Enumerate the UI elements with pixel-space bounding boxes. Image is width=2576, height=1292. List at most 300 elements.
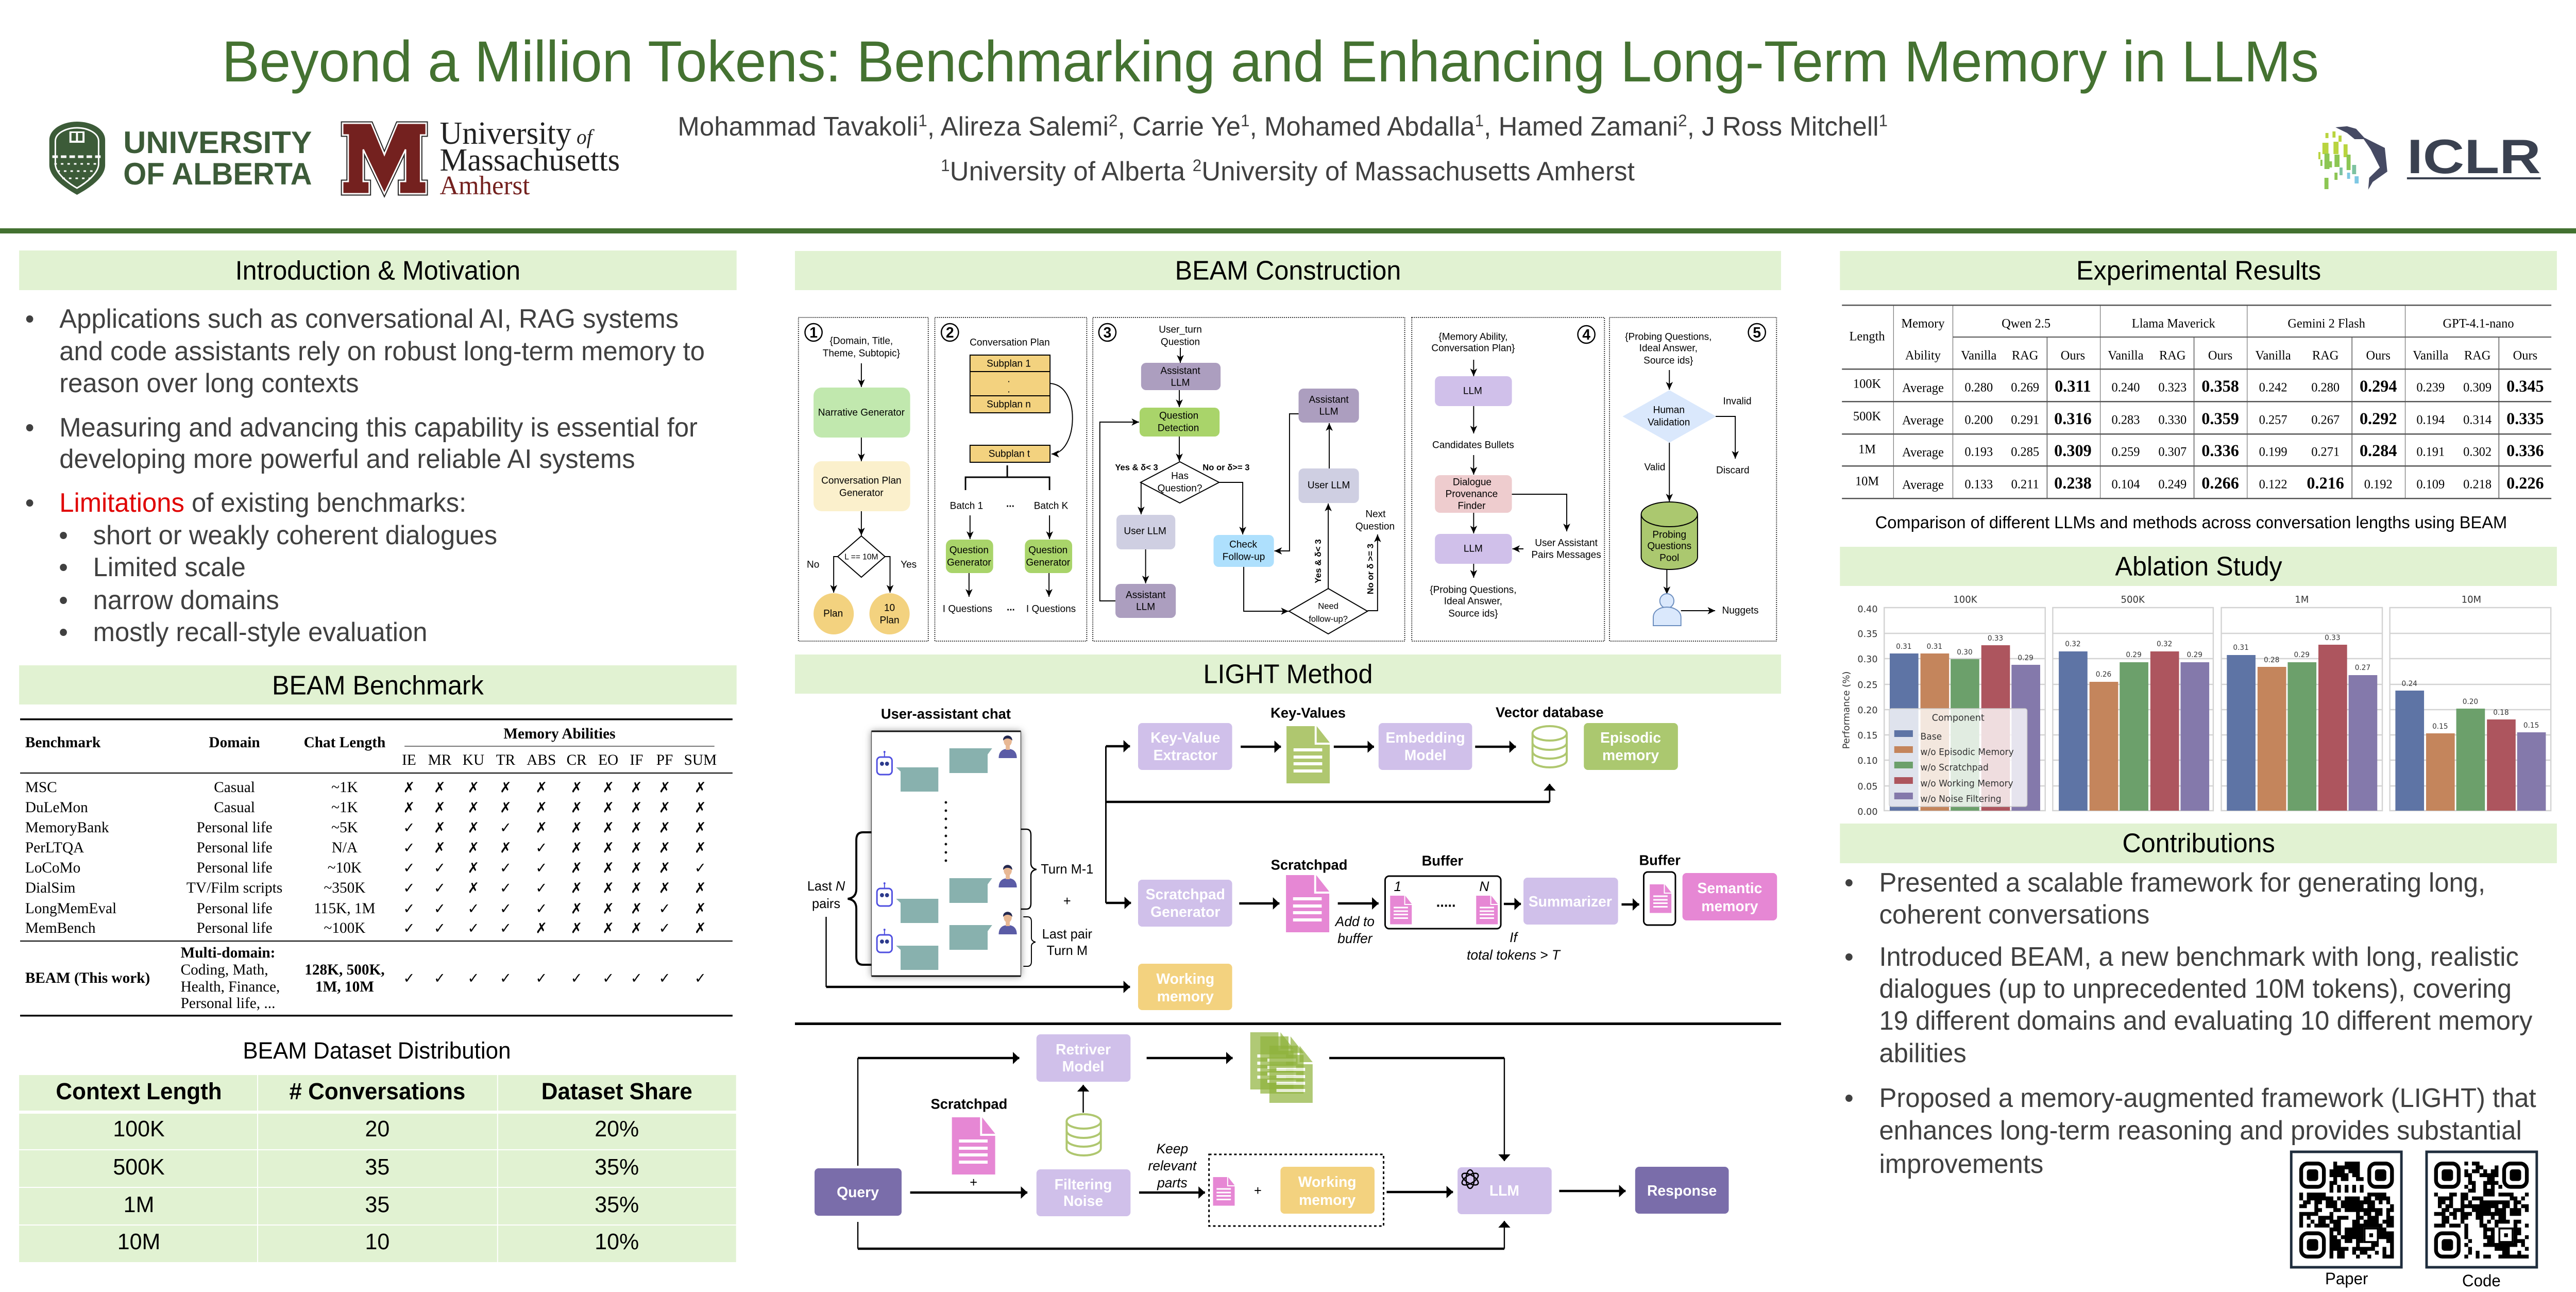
panel 2: question generation: Batch 1 <box>950 500 983 512</box>
panel 1: plan generation: Plan <box>823 608 843 619</box>
text block: introduction bullets: Limited scale <box>93 551 246 582</box>
logo: University of Alberta <box>49 122 312 195</box>
y axis: 0.30 <box>1857 654 1878 665</box>
facet: 500K: 0.29 <box>2126 651 2142 659</box>
facet: 100K: 0.31 <box>1896 643 1912 651</box>
box: scratchpad generator <box>1138 880 1232 927</box>
dashed context box <box>1209 1154 1384 1226</box>
table: experimental results: 0.271 <box>2311 445 2340 459</box>
box: retriever model: Retriver <box>1056 1042 1111 1058</box>
text block: introduction bullets <box>26 303 705 647</box>
authors: Mohammad Tavakoli <box>677 111 918 141</box>
label: add to buffer: buffer <box>1337 931 1373 946</box>
label: token threshold: If <box>1510 930 1518 945</box>
panel 2: question generation: I Questions <box>943 603 992 615</box>
box: semantic memory: Semantic <box>1697 880 1762 897</box>
table: benchmark comparison: ~100K <box>324 920 366 936</box>
panel 1: plan generation: 10 <box>884 602 895 614</box>
facet: 100K: 100K <box>1953 594 1978 606</box>
table: experimental results: 0.193 <box>1964 445 1993 459</box>
icon: retrieved documents <box>1250 1032 1313 1103</box>
text block: introduction bullets: developing more powerful and reliable AI systems <box>59 443 635 474</box>
authors: , Mohamed Abdalla <box>1250 111 1475 141</box>
panel 5: human validation: Validation <box>1648 417 1690 428</box>
panel 3: dialogue simulation: User LLM <box>1308 480 1350 491</box>
box: summarizer <box>1523 878 1618 925</box>
logo: University of Alberta: UNIVERSITY <box>123 125 312 160</box>
text block: contributions: dialogues (up to unprecedented 10M tokens), covering <box>1879 973 2512 1003</box>
panel 2: question generation: Subplan n <box>987 399 1031 410</box>
table: benchmark comparison: ~10K <box>328 860 362 876</box>
y axis: 0.00 <box>1857 807 1878 817</box>
facet: 10M: 0.15 <box>2523 721 2539 730</box>
panel 1: plan generation: Narrative Generator <box>818 407 905 418</box>
box: response <box>1635 1167 1728 1214</box>
panel 4: probing question generation: LLM <box>1464 543 1483 555</box>
table: experimental results: 0.199 <box>2259 445 2287 459</box>
authors: 1 <box>1879 111 1888 130</box>
panel 2: question generation: Batch K <box>1034 500 1069 512</box>
heading: introduction: Introduction & Motivation <box>235 256 520 286</box>
caption: results table: Comparison of different LLMs and methods across conversation lengths using BEAM <box>1875 513 2507 532</box>
box: embedding model <box>1379 723 1472 770</box>
table: dataset distribution: 20% <box>595 1117 639 1142</box>
box: filtering noise: Filtering <box>1055 1177 1112 1193</box>
text block: contributions: 19 different domains and evaluating 10 different memory <box>1879 1005 2533 1035</box>
QR code: paper: Paper <box>2325 1269 2368 1288</box>
table: benchmark comparison: Casual <box>214 799 255 816</box>
panel 3: dialogue simulation: Question <box>1159 410 1198 422</box>
y axis: 0.05 <box>1857 781 1878 792</box>
chat window <box>871 706 1021 976</box>
table: experimental results: Ours <box>2513 348 2537 363</box>
table: experimental results: 1M <box>1858 442 1876 457</box>
table: dataset distribution: 10M <box>117 1230 160 1254</box>
icon: key-values document <box>1270 704 1346 783</box>
table: benchmark comparison: Personal life <box>196 840 273 856</box>
text block: introduction bullets: short or weakly coherent dialogues <box>93 519 497 550</box>
table: benchmark comparison: Chat Length <box>304 734 386 751</box>
box: embedding model: Embedding <box>1386 730 1465 746</box>
legend: Base <box>1921 732 1942 742</box>
box: episodic memory: memory <box>1602 747 1659 764</box>
panel 5: human validation: Source ids} <box>1643 355 1693 366</box>
facet: 1M: 0.28 <box>2264 656 2279 664</box>
table: benchmark comparison: Domain <box>209 734 260 751</box>
logo: ICLR <box>2318 126 2541 190</box>
text block: contributions: Proposed a memory-augmented framework (LIGHT) that <box>1879 1082 2536 1113</box>
panel 1: plan generation: Generator <box>839 488 884 499</box>
table: benchmark comparison: ✗✗✗✗✗✗✗✗✗✗ <box>403 799 706 816</box>
panel 4: probing question generation: Ideal Answer, <box>1444 596 1502 607</box>
legend: Component <box>1932 712 1985 724</box>
bar chart: ablation study <box>1841 594 2551 817</box>
table: benchmark comparison: KU <box>463 752 484 768</box>
table: benchmark comparison: PerLTQA <box>25 840 84 856</box>
panel 2: question generation: ... <box>1007 602 1015 613</box>
box: retriever model <box>1037 1034 1130 1082</box>
table: experimental results: 0.323 <box>2158 380 2187 395</box>
table: benchmark comparison: DuLeMon <box>25 799 88 816</box>
table: benchmark comparison: ✓✓✓✓✓✓✓✓✓✓ <box>403 969 706 987</box>
panel 3: dialogue simulation: User_turn <box>1159 324 1202 335</box>
table: dataset distribution: Context Length <box>56 1079 222 1104</box>
table: dataset distribution: 20 <box>365 1117 389 1142</box>
table: experimental results: 0.133 <box>1964 477 1993 492</box>
panel 5: human validation: Valid <box>1644 462 1665 473</box>
legend: w/o Noise Filtering <box>1921 794 2002 804</box>
table: benchmark comparison: 115K, 1M <box>314 900 376 917</box>
facet: 1M: 1M <box>2295 594 2309 606</box>
table: experimental results: 0.109 <box>2416 477 2445 492</box>
y axis: 0.35 <box>1857 629 1878 640</box>
table: experimental results: 0.280 <box>1964 380 1993 395</box>
table: benchmark comparison <box>20 718 733 1016</box>
table: benchmark comparison: LongMemEval <box>25 900 116 917</box>
facet: 500K: 0.29 <box>2187 651 2202 659</box>
panel 4: probing question generation: LLM <box>1463 385 1482 397</box>
panel 4: probing question generation: User Assistant <box>1535 538 1598 549</box>
buffer: ..... <box>1436 894 1456 910</box>
box: query <box>815 1168 902 1216</box>
buffer: N <box>1479 879 1489 894</box>
divider <box>795 1022 1781 1025</box>
facet: 100K: 0.30 <box>1957 648 1973 657</box>
authors: , Carrie Ye <box>1118 111 1241 141</box>
logo: University of Massachusetts Amherst <box>343 115 620 200</box>
facet: 1M: 0.29 <box>2294 651 2310 659</box>
heading: LIGHT method: LIGHT Method <box>1204 659 1372 689</box>
facet: 500K: 0.32 <box>2157 640 2172 648</box>
icon: scratchpad input: Scratchpad <box>930 1096 1007 1112</box>
table: experimental results: 0.330 <box>2158 413 2187 427</box>
panel 2: question generation: . <box>1007 374 1010 385</box>
affiliations: University of Alberta <box>950 156 1192 186</box>
panel 1: plan generation <box>799 317 928 641</box>
table: experimental results: 0.104 <box>2112 477 2140 492</box>
heading: experimental results <box>1840 251 2557 290</box>
table: experimental results: 0.311 <box>2055 377 2091 396</box>
table: experimental results: Qwen 2.5 <box>2002 316 2050 331</box>
box: embedding model: Model <box>1404 747 1446 764</box>
panel 3: dialogue simulation: 3 <box>1104 325 1111 341</box>
panel 3: dialogue simulation: No or δ >= 3 <box>1366 544 1376 594</box>
table: benchmark comparison: Coding, Math, <box>181 962 268 978</box>
panel 5: human validation: Ideal Answer, <box>1639 343 1698 354</box>
box: episodic memory: Episodic <box>1600 730 1661 746</box>
table: benchmark comparison: BEAM (This work) <box>25 970 150 986</box>
table: dataset distribution: 500K <box>113 1155 165 1180</box>
table: benchmark comparison: Casual <box>214 779 255 796</box>
table: experimental results: 0.309 <box>2054 442 2092 460</box>
facet: 500K: 500K <box>2121 594 2145 606</box>
heading: experimental results: Experimental Results <box>2076 256 2321 286</box>
facet: 10M: 10M <box>2462 594 2481 606</box>
label: add to buffer <box>1334 914 1375 946</box>
box: working memory <box>1138 964 1232 1010</box>
braces and turn labels: + <box>1063 894 1071 909</box>
heading: ablation study: Ablation Study <box>2115 551 2282 581</box>
text block: introduction bullets: Limitations of existing benchmarks: <box>59 487 466 517</box>
facet: 1M: 0.27 <box>2355 664 2370 672</box>
authors: 1 <box>1475 111 1484 130</box>
panel 2: question generation: Generator <box>947 557 991 568</box>
panel 2: question generation: Subplan 1 <box>987 358 1031 370</box>
table: experimental results: Llama Maverick <box>2132 316 2215 331</box>
facet: 10M: 0.20 <box>2463 698 2478 706</box>
y axis: 0.25 <box>1857 680 1878 691</box>
table: experimental results: 0.336 <box>2201 442 2239 460</box>
table: experimental results: Vanilla <box>2108 348 2144 363</box>
table: experimental results: 0.226 <box>2506 474 2544 493</box>
table: experimental results: 0.267 <box>2311 413 2340 427</box>
facet: 100K: 0.33 <box>1988 634 2003 643</box>
table: benchmark comparison: ✓✓✗✓✓✗✗✗✗✓ <box>403 859 706 877</box>
authors: 2 <box>1109 111 1117 130</box>
dashed context box: Working <box>1298 1174 1357 1190</box>
box: query: Query <box>837 1184 879 1201</box>
heading: contributions: Contributions <box>2122 828 2275 858</box>
icon: scratchpad input: + <box>970 1176 977 1190</box>
panel 3: dialogue simulation: Question <box>1161 337 1200 348</box>
logo: University of Massachusetts Amherst: of <box>577 126 595 148</box>
table: experimental results: RAG <box>2012 348 2039 363</box>
table: experimental results: GPT-4.1-nano <box>2443 316 2514 331</box>
panel 5: human validation: Human <box>1653 405 1685 416</box>
table: benchmark comparison: ✓✓✓✓✗✗✗✗✓✗ <box>403 919 706 937</box>
panel 5: human validation: Invalid <box>1723 396 1752 407</box>
legend <box>1889 709 2027 807</box>
panel 4: probing question generation: {Memory Ability, <box>1438 331 1507 343</box>
panel 4: probing question generation: Dialogue <box>1453 477 1492 488</box>
dashed context box: memory <box>1299 1192 1355 1209</box>
table: experimental results: 0.191 <box>2416 445 2445 459</box>
heading: BEAM construction: BEAM Construction <box>1175 256 1401 286</box>
heading: LIGHT method <box>795 655 1781 694</box>
panel 3: dialogue simulation: LLM <box>1171 377 1190 389</box>
text block: contributions: enhances long-term reasoning and provides substantial <box>1879 1115 2522 1145</box>
table: experimental results: 0.192 <box>2364 477 2393 492</box>
table: dataset distribution: 10% <box>595 1230 639 1254</box>
table: benchmark comparison: ABS <box>527 752 556 768</box>
panel: LIGHT query flow <box>815 1032 1728 1249</box>
y axis: 0.40 <box>1857 604 1878 615</box>
text block: contributions <box>1845 867 2536 1179</box>
facet: 1M <box>2227 594 2377 811</box>
table: benchmark comparison: Health, Finance, <box>181 979 280 995</box>
table: experimental results: 0.280 <box>2311 380 2340 395</box>
panel 3: dialogue simulation: Yes & δ< 3 <box>1115 462 1158 473</box>
table: experimental results: 0.218 <box>2463 477 2492 492</box>
table: dataset distribution: # Conversations <box>289 1079 465 1104</box>
facet: 1M: 0.31 <box>2233 644 2249 652</box>
text block: contributions: Introduced BEAM, a new benchmark with long, realistic <box>1879 941 2519 971</box>
table: experimental results: 0.269 <box>2011 380 2039 395</box>
table: benchmark comparison: IE <box>402 752 416 768</box>
panel 3: dialogue simulation: Assistant <box>1309 394 1349 406</box>
panel 2: question generation: ... <box>1006 498 1014 510</box>
table: experimental results: 0.302 <box>2463 445 2492 459</box>
icon: vector database <box>1066 1114 1101 1155</box>
table: benchmark comparison: ✗✗✗✗✗✗✗✗✗✗ <box>403 779 706 796</box>
panel 2: question generation: 2 <box>946 325 954 341</box>
panel: LIGHT memory construction <box>807 704 1777 1010</box>
text block: contributions: abilities <box>1879 1037 1967 1068</box>
panel: BEAM benchmark <box>19 665 737 1016</box>
panel 5: human validation: Questions <box>1647 541 1691 552</box>
panel 3: dialogue simulation: Follow-up <box>1223 551 1265 563</box>
QR code: code: Code <box>2462 1271 2501 1290</box>
table: benchmark comparison: PF <box>656 752 673 768</box>
box: scratchpad generator: Scratchpad <box>1146 886 1225 903</box>
table: benchmark comparison: ✓✗✗✗✓✗✗✗✗✗ <box>403 839 706 857</box>
table: experimental results: 0.257 <box>2259 413 2287 427</box>
panel 4: probing question generation <box>1412 317 1604 641</box>
icon: vector database: Vector database <box>1496 704 1604 720</box>
table: experimental results: 0.309 <box>2463 380 2492 395</box>
braces and turn labels <box>807 829 1093 966</box>
table: experimental results: 0.266 <box>2201 474 2239 493</box>
table: dataset distribution: 100K <box>113 1117 165 1142</box>
buffer <box>1385 852 1501 929</box>
table: benchmark comparison: MemBench <box>25 920 96 936</box>
table: benchmark comparison: Personal life <box>196 920 273 936</box>
facet: 1M: 0.33 <box>2325 634 2341 642</box>
braces and turn labels: Turn M <box>1047 944 1088 958</box>
table: benchmark comparison: ~5K <box>331 819 358 836</box>
dashed context box: + <box>1254 1184 1262 1198</box>
table: benchmark comparison: LoCoMo <box>25 860 80 876</box>
box: summarizer: Summarizer <box>1529 894 1612 910</box>
box: key-value extractor <box>1138 723 1232 770</box>
table: experimental results: 0.307 <box>2158 445 2187 459</box>
box: key-value extractor: Key-Value <box>1150 730 1220 746</box>
logo: ICLR: ICLR <box>2407 129 2541 183</box>
table: experimental results: 0.200 <box>1964 413 1993 427</box>
buffer output: Buffer <box>1639 852 1681 868</box>
table: experimental results: Memory <box>1901 316 1945 331</box>
table: benchmark comparison: ✓✗✗✓✗✗✗✗✗✗ <box>403 819 706 836</box>
table: dataset distribution: 35% <box>595 1193 639 1217</box>
box: working memory: Working <box>1156 971 1214 987</box>
table: experimental results: 500K <box>1853 409 1881 424</box>
table: experimental results: 100K <box>1853 377 1881 391</box>
table: experimental results: Gemini 2 Flash <box>2287 316 2365 331</box>
table: dataset distribution: 10 <box>365 1230 389 1254</box>
box: semantic memory <box>1683 873 1777 920</box>
panel 3: dialogue simulation: LLM <box>1319 406 1338 417</box>
panel 5: human validation <box>1609 317 1776 641</box>
facet: 10M: 0.24 <box>2402 680 2417 688</box>
icon: scratchpad input <box>930 1096 1007 1190</box>
panel 4: probing question generation: Pairs Messages <box>1531 549 1601 561</box>
table: experimental results: Ours <box>2208 348 2232 363</box>
table: experimental results: 0.359 <box>2201 410 2239 428</box>
panel 1: plan generation: Yes <box>901 559 917 571</box>
box: scratchpad generator: Generator <box>1150 904 1220 920</box>
braces and turn labels: Last pair <box>1042 927 1092 942</box>
panel 3: dialogue simulation: LLM <box>1136 601 1155 613</box>
panel 2: question generation: Question <box>950 545 989 556</box>
panel 4: probing question generation: Conversation Plan} <box>1431 343 1515 354</box>
table: experimental results: Average <box>1902 381 1944 395</box>
text block: introduction bullets: Applications such as conversational AI, RAG systems <box>59 303 679 333</box>
panel 2: question generation: Question <box>1028 545 1067 556</box>
table: benchmark comparison: N/A <box>332 840 358 856</box>
heading: BEAM construction <box>795 251 1781 290</box>
panel 3: dialogue simulation: Assistant <box>1160 365 1200 377</box>
panel 3: dialogue simulation: Need <box>1318 601 1338 611</box>
box: working memory: memory <box>1157 988 1214 1005</box>
panel 5: human validation: Pool <box>1659 552 1679 564</box>
table: benchmark comparison: ✓✓✗✓✓✗✗✗✗✗ <box>403 879 706 897</box>
label: keep relevant parts: relevant <box>1148 1158 1197 1173</box>
table: experimental results: 0.240 <box>2112 380 2140 395</box>
affiliations: 1 <box>941 156 950 175</box>
panel 5: human validation: Nuggets <box>1722 605 1758 616</box>
legend: w/o Episodic Memory <box>1921 747 2014 758</box>
authors: 1 <box>1241 111 1249 130</box>
box: key-value extractor: Extractor <box>1154 747 1217 764</box>
table: experimental results: Average <box>1902 445 1944 460</box>
table: experimental results: RAG <box>2312 348 2339 363</box>
table: dataset distribution <box>19 1075 736 1262</box>
table: experimental results: Average <box>1902 478 1944 492</box>
table: benchmark comparison: MSC <box>25 779 57 796</box>
legend: w/o Working Memory <box>1921 779 2013 789</box>
authors: 1 <box>918 111 927 130</box>
panel 5: human validation: Probing <box>1652 529 1686 541</box>
braces and turn labels: Last N <box>807 879 845 894</box>
y axis <box>1841 604 1878 817</box>
panel 3: dialogue simulation: Next <box>1365 509 1386 520</box>
table: experimental results: Average <box>1902 413 1944 428</box>
box: LLM <box>1458 1167 1552 1214</box>
table: experimental results: RAG <box>2159 348 2186 363</box>
panel 3: dialogue simulation: Check <box>1229 539 1257 550</box>
heading: introduction <box>19 250 737 290</box>
table: dataset distribution: 1M <box>124 1193 154 1217</box>
text block: introduction bullets: Measuring and advancing this capability is essential for <box>59 412 698 442</box>
table: benchmark comparison: TV/Film scripts <box>187 880 282 896</box>
title: Beyond a Million Tokens: Benchmarking and Enhancing Long-Term Memory in LLMs <box>222 30 2319 94</box>
facet: 10M <box>2395 594 2546 811</box>
table: benchmark comparison: SUM <box>684 752 717 768</box>
table: experimental results: 0.238 <box>2054 474 2092 493</box>
label: keep relevant parts: Keep <box>1157 1141 1188 1156</box>
logo: University of Alberta: OF ALBERTA <box>123 156 312 191</box>
panel 4: probing question generation: Source ids} <box>1448 608 1498 619</box>
text block: introduction bullets: narrow domains <box>93 584 279 615</box>
panel 5: human validation: {Probing Questions, <box>1625 331 1711 343</box>
text block: introduction bullets: reason over long contexts <box>59 367 359 398</box>
facet: 100K: 0.31 <box>1927 643 1942 651</box>
table: experimental results: 0.239 <box>2416 380 2445 395</box>
table: dataset distribution: 35 <box>365 1193 389 1217</box>
panel 2: question generation: Subplan t <box>989 448 1030 460</box>
QR code: code <box>2427 1152 2537 1290</box>
panel 1: plan generation: Conversation Plan <box>821 475 902 486</box>
facet: 100K: 0.29 <box>2018 654 2033 662</box>
facet: 10M: 0.15 <box>2432 723 2448 731</box>
icon: scratchpad document <box>1271 857 1347 932</box>
table: experimental results: 0.194 <box>2416 413 2445 427</box>
label: add to buffer: Add to <box>1334 914 1375 929</box>
box: filtering noise: Noise <box>1063 1193 1103 1210</box>
text block: introduction bullets: and code assistants rely on robust long-term memory to <box>59 335 705 366</box>
table: experimental results: 0.294 <box>2360 377 2397 396</box>
panel 3: dialogue simulation: Has <box>1171 471 1189 482</box>
